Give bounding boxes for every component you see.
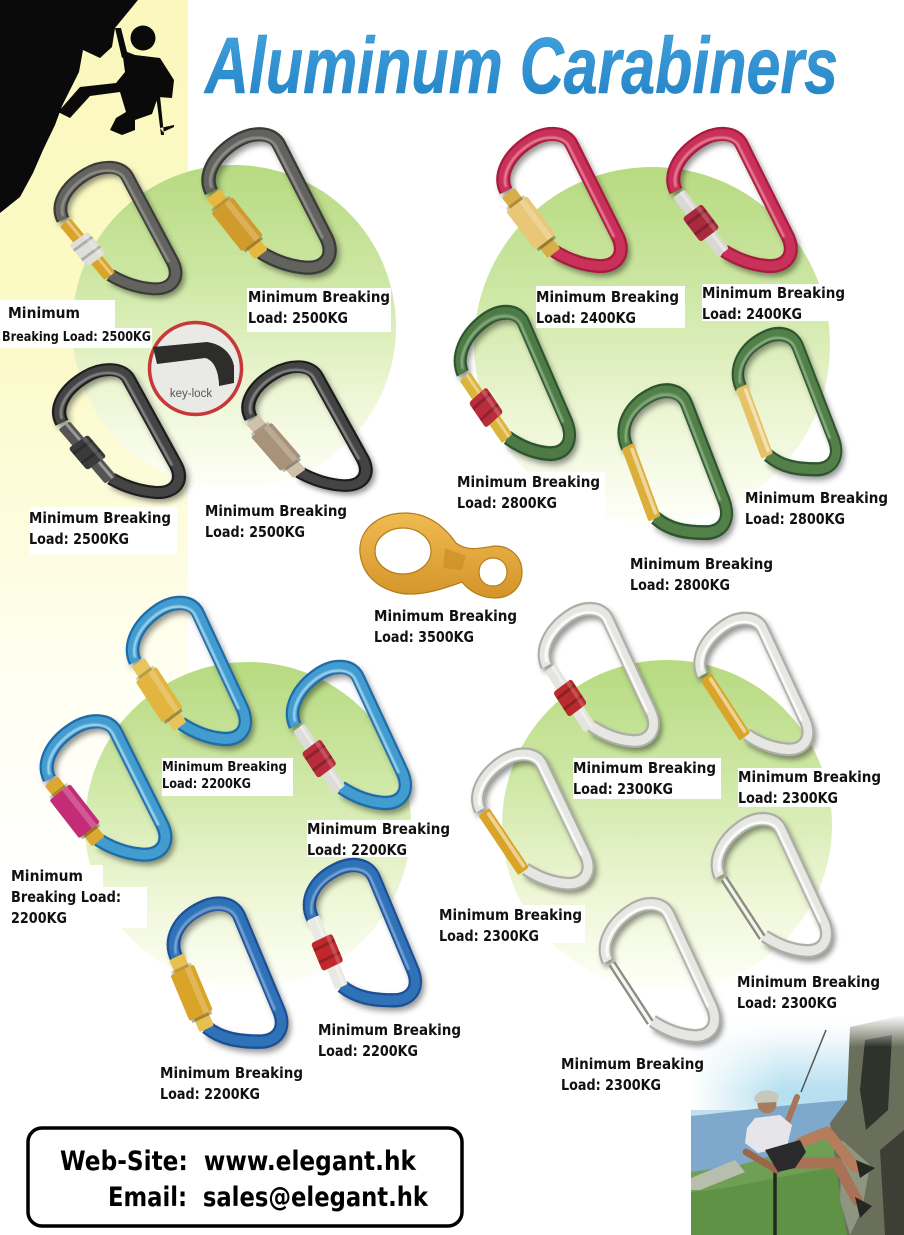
label: silver carabiner 4: Load: 2300KG (737, 994, 837, 1012)
icon: key-lock detail (150, 322, 242, 414)
icon: key-lock detail: key-lock (170, 388, 212, 400)
label: grey carabiner 1: Minimum (8, 304, 80, 322)
carabiner: grey silver gate (56, 167, 179, 293)
carabiner: silver wire gate bottom (605, 904, 717, 1040)
label: grey carabiner 2: Load: 2500KG (248, 309, 348, 327)
label: figure-eight: Load: 3500KG (374, 628, 474, 646)
label: silver carabiner 3 (437, 905, 585, 945)
label: grey carabiner 1: Breaking Load: 2500KG (2, 330, 151, 345)
figure-eight descender (360, 513, 522, 598)
label: blue carabiner 3 (0, 865, 147, 928)
carabiner: silver red gate (541, 609, 656, 745)
label: silver carabiner 2: Minimum Breaking (738, 768, 881, 786)
label: silver carabiner 1 (573, 758, 721, 799)
carabiner: silver bent gold gate (700, 619, 811, 753)
label: red carabiner 2: Minimum Breaking (702, 284, 845, 302)
label: blue carabiner 1: Minimum Breaking (162, 760, 287, 775)
carabiner: blue gold gate (128, 603, 248, 743)
label: blue carabiner 5: Minimum Breaking (318, 1021, 461, 1039)
label: green carabiner 2 (630, 555, 773, 594)
label: green carabiner 3: Minimum Breaking (745, 489, 888, 507)
carabiner: blue red gate (289, 667, 408, 807)
label: grey carabiner 2 (247, 288, 391, 332)
label: silver carabiner 5: Minimum Breaking (561, 1055, 704, 1073)
label: green carabiner 1 (457, 472, 605, 515)
label: red carabiner 1: Minimum Breaking (536, 288, 679, 306)
label: silver carabiner 4 (737, 972, 880, 1012)
label: blue carabiner 4: Load: 2200KG (160, 1085, 260, 1103)
label: silver carabiner 5: Load: 2300KG (561, 1076, 661, 1094)
label: black carabiner 1 (29, 507, 177, 555)
label: red carabiner 2: Load: 2400KG (702, 305, 802, 323)
label: silver carabiner 1: Minimum Breaking (573, 759, 716, 777)
carabiner: green gold bar gate (622, 391, 729, 537)
label: red carabiner 1 (536, 286, 685, 328)
carabiner: dark blue gold gate (165, 904, 285, 1046)
label: green carabiner 2: Load: 2800KG (630, 576, 730, 594)
label: blue carabiner 1 (162, 758, 293, 796)
label: blue carabiner 5 (318, 1021, 461, 1060)
label: blue carabiner 5: Load: 2200KG (318, 1042, 418, 1060)
label: figure-eight: Minimum Breaking (374, 607, 517, 625)
contact box (28, 1128, 462, 1226)
label: black carabiner 1: Minimum Breaking (29, 509, 171, 527)
carabiner: black tan gate (242, 367, 369, 489)
label: red carabiner 2 (702, 284, 848, 323)
carabiner: red gold gate (498, 134, 624, 270)
label: blue carabiner 4 (160, 1064, 303, 1103)
label: silver carabiner 2 (738, 768, 885, 807)
carabiner: dark blue red gate (302, 865, 418, 1004)
background green circles (72, 165, 832, 990)
carabiner: green straight gate (736, 334, 839, 473)
label: silver carabiner 1: Load: 2300KG (573, 780, 673, 798)
carabiner: grey gold gate (202, 134, 333, 272)
label: green carabiner 1: Minimum Breaking (457, 473, 600, 491)
label: green carabiner 1: Load: 2800KG (457, 494, 557, 512)
photo: man abseiling on cliff (691, 1015, 904, 1235)
climber silhouette on rock (0, 0, 174, 213)
label: blue carabiner 3: Minimum (11, 867, 83, 885)
label: green carabiner 2: Minimum Breaking (630, 555, 773, 573)
label: black carabiner 2: Minimum Breaking (205, 502, 347, 520)
label: blue carabiner 2: Load: 2200KG (307, 841, 407, 859)
label: green carabiner 3: Load: 2800KG (745, 510, 845, 528)
carabiner: green red gate (456, 312, 572, 458)
carabiner: silver straight gold gate (478, 754, 591, 888)
carabiner: black screw gate (55, 370, 182, 496)
label: black carabiner 1: Load: 2500KG (29, 530, 129, 548)
label: figure-eight (374, 607, 517, 646)
label: silver carabiner 3: Minimum Breaking (439, 906, 582, 924)
label: blue carabiner 1: Load: 2200KG (162, 777, 251, 792)
label: blue carabiner 2 (307, 820, 450, 859)
label: silver carabiner 5 (561, 1055, 704, 1094)
email line: Email: sales@elegant.hk (108, 1182, 429, 1213)
label: black carabiner 2: Load: 2500KG (205, 523, 305, 541)
label: silver carabiner 2: Load: 2300KG (738, 789, 838, 807)
label: red carabiner 1: Load: 2400KG (536, 309, 636, 327)
website line: Web-Site: www.elegant.hk (60, 1146, 417, 1177)
carabiner: silver wire gate right (717, 819, 829, 955)
label: silver carabiner 3: Load: 2300KG (439, 927, 539, 945)
label: silver carabiner 4: Minimum Breaking (737, 973, 880, 991)
label: black carabiner 2 (205, 500, 352, 550)
label: blue carabiner 3: Breaking Load: (11, 888, 121, 906)
label: blue carabiner 3: 2200KG (11, 909, 67, 927)
label: blue carabiner 4: Minimum Breaking (160, 1064, 303, 1082)
label: grey carabiner 2: Minimum Breaking (248, 288, 390, 306)
label: green carabiner 3 (745, 488, 890, 530)
label: grey carabiner 1 (0, 300, 152, 348)
carabiner: red screw gate (669, 134, 794, 270)
carabiner: blue magenta gate (41, 721, 168, 859)
label: blue carabiner 2: Minimum Breaking (307, 820, 450, 838)
